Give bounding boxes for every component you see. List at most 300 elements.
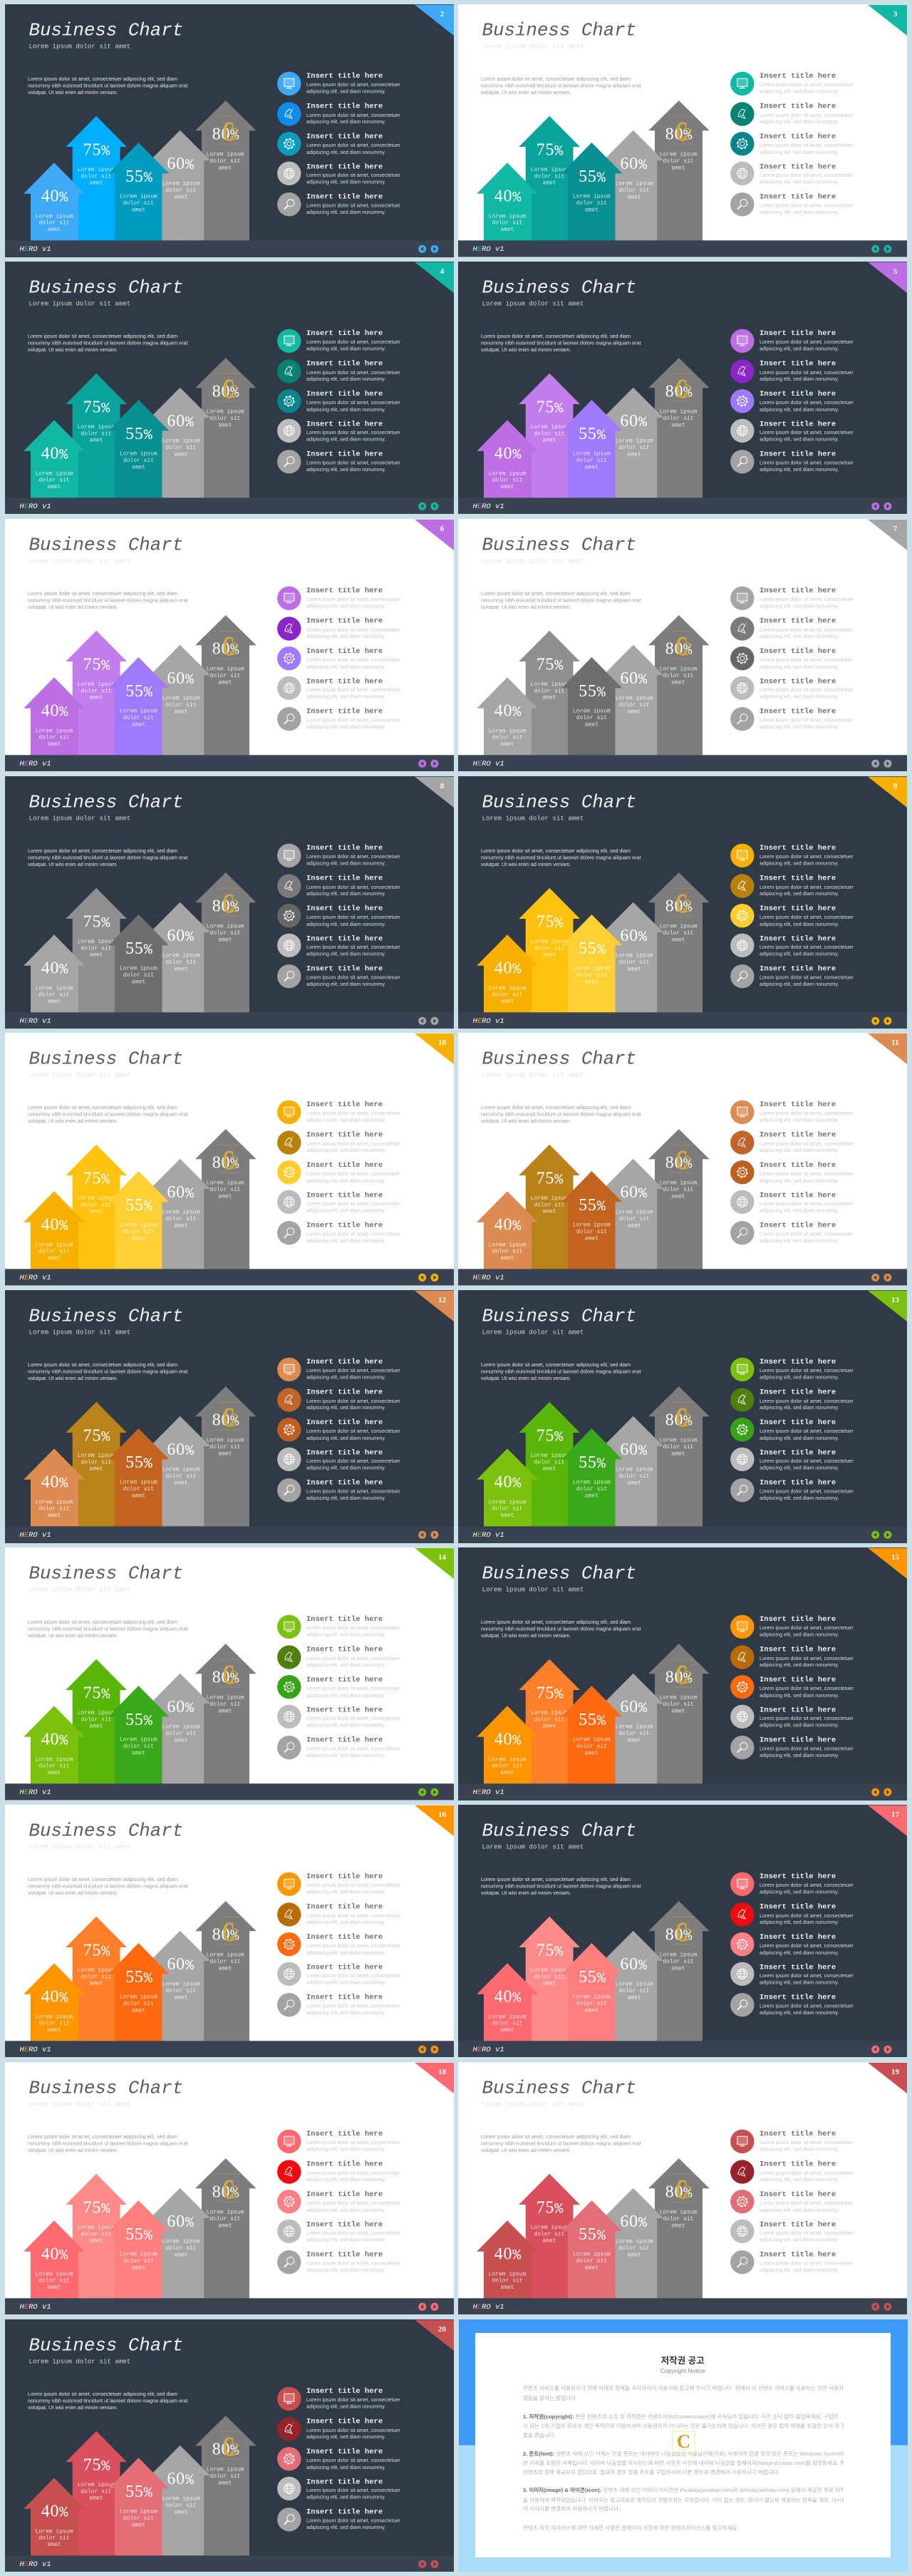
arrow: 40%: Lorem ipsum <box>35 2271 73 2277</box>
corner tab: 18 <box>437 2068 446 2076</box>
body text: Lorem ipsum dolor sit amet, consectetuer adipiscing elit, sed diam <box>481 76 631 82</box>
arrow: 40%: 40% <box>41 2502 68 2521</box>
corner tab <box>415 2062 453 2093</box>
logo watermark: C <box>676 373 688 403</box>
item 2: adipiscing elit, sed diam nonummy. <box>760 890 839 897</box>
item 4 <box>277 1190 400 1214</box>
arrow: 80% <box>648 2158 710 2298</box>
arrow: 60%: dolor sit <box>165 959 196 966</box>
arrow: 60%: dolor sit <box>165 2503 196 2509</box>
item 4 <box>277 2219 400 2243</box>
item 5: Insert title here <box>760 1222 836 1230</box>
item 1: Insert title here <box>306 2387 383 2396</box>
title: Business Chart <box>482 1049 636 1070</box>
arrow: 40% <box>24 934 85 1012</box>
arrow: 75%: amet <box>89 952 103 958</box>
item 2 <box>730 102 854 126</box>
arrow: 60%: 60% <box>621 1441 648 1460</box>
arrow: 55%: amet <box>585 979 598 985</box>
logo watermark <box>218 373 239 403</box>
panel: copyright notice <box>459 2319 908 2572</box>
item 4: Insert title here <box>760 1449 836 1458</box>
arrow: 40%: amet <box>501 1513 514 1519</box>
arrow: 40% <box>24 1963 85 2041</box>
arrow: 40% <box>477 2220 538 2298</box>
item 5 <box>277 964 400 988</box>
arrow: 60%: dolor sit <box>165 445 196 451</box>
arrow: 55%: Lorem ipsum <box>119 451 157 458</box>
item 4: adipiscing elit, sed diam nonummy. <box>760 1722 839 1729</box>
arrow: 80%: 80% <box>212 1668 239 1687</box>
logo watermark: C <box>222 888 234 918</box>
arrow: 80%: amet <box>672 1708 685 1714</box>
panel: slide 12 <box>4 1290 453 1543</box>
footer: HERO v1 <box>473 1788 504 1797</box>
corner tab: 16 <box>437 1810 446 1819</box>
item 3 <box>277 904 400 927</box>
item 5 <box>277 1221 400 1245</box>
logo watermark: C <box>676 1917 688 1947</box>
arrow: 55% <box>108 400 169 498</box>
arrow: 60%: amet <box>174 1223 187 1230</box>
arrow: 80%: dolor sit <box>663 673 694 679</box>
item 4: Insert title here <box>306 934 383 943</box>
item 2 <box>277 102 400 126</box>
subtitle: Lorem ipsum dolor sit amet <box>28 2100 130 2108</box>
arrow: 40%: Lorem ipsum <box>489 1500 527 1506</box>
item 2: Insert title here <box>306 1903 383 1912</box>
item 1: Insert title here <box>760 1101 836 1109</box>
arrow: 55%: dolor sit <box>576 972 607 979</box>
arrow: 75% <box>519 887 580 1012</box>
arrow: 80%: amet <box>218 1708 232 1714</box>
arrow: 40%: amet <box>47 484 61 490</box>
item 3: Insert title here <box>760 1161 836 1170</box>
body text: Lorem ipsum dolor sit amet, consectetuer adipiscing elit, sed diam <box>481 1876 631 1882</box>
item 3 <box>277 2190 400 2213</box>
panel: slide 19 <box>458 2062 907 2314</box>
arrow: 55%: 55% <box>125 425 152 444</box>
item 4 <box>730 2219 854 2243</box>
arrow: 60%: 60% <box>167 2212 194 2232</box>
arrow: 60% <box>150 388 209 498</box>
item 2: adipiscing elit, sed diam nonummy. <box>306 1404 385 1411</box>
item 3: Insert title here <box>306 2448 383 2456</box>
item 3: adipiscing elit, sed diam nonummy. <box>306 1949 385 1956</box>
arrow: 55%: dolor sit <box>576 1229 607 1235</box>
item 2: Insert title here <box>306 360 383 369</box>
arrow: 60%: dolor sit <box>619 702 650 709</box>
item 2 <box>730 1902 854 1927</box>
arrow: 40%: amet <box>47 741 61 748</box>
title: Business Chart <box>482 792 636 813</box>
arrow: 80% <box>195 2158 256 2298</box>
item 4 <box>277 1448 400 1471</box>
arrow: 80%: amet <box>218 1451 232 1458</box>
item 4: Insert title here <box>760 934 836 943</box>
item 5 <box>277 1993 400 2016</box>
item 3: Lorem ipsum dolor sit amet, consectetuer <box>306 1171 400 1178</box>
arrow: 60% <box>150 644 209 755</box>
item 2: Insert title here <box>760 874 836 882</box>
logo watermark: C <box>222 1145 234 1175</box>
item 3: Lorem ipsum dolor sit amet, consectetuer <box>760 1428 854 1434</box>
item 3: adipiscing elit, sed diam nonummy. <box>306 2463 385 2470</box>
body text: Lorem ipsum dolor sit amet, consectetuer adipiscing elit, sed diam <box>481 1361 631 1368</box>
item 3: Insert title here <box>760 905 836 913</box>
item 1: Insert title here <box>306 844 383 852</box>
arrow: 40%: 40% <box>41 2245 68 2264</box>
arrow: 75%: dolor sit <box>81 1460 111 1466</box>
arrow: 55%: 55% <box>579 939 606 959</box>
arrow: 80%: Lorem ipsum <box>660 409 698 416</box>
logo watermark <box>672 1917 693 1947</box>
item 1: Lorem ipsum dolor sit amet, consectetuer <box>760 81 854 88</box>
item 3: Insert title here <box>760 2190 836 2199</box>
arrow: 55%: Lorem ipsum <box>119 2251 157 2257</box>
panel: slide 3 <box>458 4 907 257</box>
arrow: 60%: 60% <box>167 1698 194 1717</box>
item 5: adipiscing elit, sed diam nonummy. <box>306 2009 385 2016</box>
arrow: 60%: 60% <box>167 1183 194 1202</box>
logo watermark <box>672 2431 695 2453</box>
arrow: 55%: amet <box>131 979 145 985</box>
arrow: 40%: Lorem ipsum <box>35 2528 73 2535</box>
arrow: 80%: 80% <box>665 1668 693 1687</box>
item 2: Insert title here <box>760 1389 836 1397</box>
arrow: 60%: 60% <box>167 2470 194 2489</box>
title: Business Chart <box>482 535 636 555</box>
arrow: 55% <box>561 915 622 1012</box>
arrow: 75%: 75% <box>83 655 110 674</box>
arrow: 60%: 60% <box>621 1955 648 1974</box>
item 1: Insert title here <box>760 329 836 338</box>
item 5: adipiscing elit, sed diam nonummy. <box>306 723 385 729</box>
item 4: adipiscing elit, sed diam nonummy. <box>306 950 385 957</box>
item 5: Insert title here <box>306 1994 383 2002</box>
arrow: 60% <box>603 2188 663 2298</box>
item 2: Lorem ipsum dolor sit amet, consectetuer <box>306 2426 400 2433</box>
arrow: 55%: amet <box>585 1236 598 1242</box>
item 3: adipiscing elit, sed diam nonummy. <box>760 2207 839 2213</box>
item 5: Insert title here <box>306 964 383 973</box>
arrow: 55%: 55% <box>579 1453 606 1473</box>
item 4: Insert title here <box>760 420 836 428</box>
arrow: 60%: dolor sit <box>619 445 650 451</box>
item 4: Lorem ipsum dolor sit amet, consectetuer <box>306 944 400 950</box>
arrow: 40%: amet <box>501 2027 514 2034</box>
arrow: 55%: Lorem ipsum <box>119 1480 157 1486</box>
arrow: 40%: 40% <box>494 2245 522 2264</box>
item 3 <box>277 1675 400 1699</box>
item 1: adipiscing elit, sed diam nonummy. <box>760 1888 839 1895</box>
body text: volutpat. Ut wisi enim ad minim veniam. <box>27 346 118 353</box>
item 2: Lorem ipsum dolor sit amet, consectetuer <box>760 883 854 890</box>
arrow: 75%: Lorem ipsum <box>531 167 569 173</box>
item 3: Lorem ipsum dolor sit amet, consectetuer <box>760 142 854 148</box>
arrow: 75%: Lorem ipsum <box>77 167 115 173</box>
arrow: 75%: Lorem ipsum <box>77 1195 115 1202</box>
arrow: 40%: dolor sit <box>38 1506 69 1513</box>
arrow: 80%: 80% <box>212 382 239 401</box>
arrow: 55% <box>108 657 169 755</box>
arrow: 60%: amet <box>174 2252 187 2258</box>
item 4: adipiscing elit, sed diam nonummy. <box>306 2493 385 2500</box>
body text: volutpat. Ut wisi enim ad minim veniam. <box>481 1632 571 1639</box>
body text: volutpat. Ut wisi enim ad minim veniam. <box>481 89 571 96</box>
arrow: 60%: dolor sit <box>619 187 650 194</box>
item 1: Insert title here <box>760 1615 836 1624</box>
logo watermark: C <box>222 116 234 146</box>
body text: nonummy nibh euismod tincidunt ut laoreet dolore magna aliquam erat <box>481 2140 641 2146</box>
arrow: 75%: 75% <box>537 1684 564 1703</box>
footer: HERO v1 <box>19 1017 51 1026</box>
item 2: adipiscing elit, sed diam nonummy. <box>760 2176 839 2183</box>
arrow: 80%: amet <box>672 165 685 171</box>
arrow: 80%: Lorem ipsum <box>206 923 244 929</box>
corner tab <box>868 1291 907 1322</box>
arrow: 75%: dolor sit <box>81 1974 111 1980</box>
arrow: 40%: amet <box>501 2284 514 2291</box>
item 2: Lorem ipsum dolor sit amet, consectetuer <box>306 883 400 890</box>
item 5: adipiscing elit, sed diam nonummy. <box>760 980 839 986</box>
arrow: 80% <box>195 358 256 498</box>
item 4: adipiscing elit, sed diam nonummy. <box>306 1722 385 1729</box>
arrow: 80%: 80% <box>665 639 693 659</box>
item 4: adipiscing elit, sed diam nonummy. <box>760 693 839 699</box>
arrow: 55%: 55% <box>579 1968 606 1987</box>
arrow: 55%: amet <box>131 464 145 470</box>
item 4 <box>730 933 854 957</box>
item 4: adipiscing elit, sed diam nonummy. <box>760 1207 839 1214</box>
arrow: 55%: amet <box>585 721 598 728</box>
item 4 <box>277 933 400 957</box>
item 4 <box>730 162 854 185</box>
arrow: 55%: dolor sit <box>123 1743 154 1750</box>
corner tab: 20 <box>437 2325 446 2334</box>
arrow: 75%: 75% <box>83 1684 110 1703</box>
item 4: Lorem ipsum dolor sit amet, consectetuer <box>760 1972 854 1979</box>
arrow: 75%: dolor sit <box>534 1716 565 1723</box>
item 2: Lorem ipsum dolor sit amet, consectetuer <box>760 1912 854 1919</box>
arrow: 60%: dolor sit <box>165 1473 196 1480</box>
panel: slide 17 <box>458 1805 907 2057</box>
arrow: 55%: dolor sit <box>576 1743 607 1750</box>
corner tab: 5 <box>893 267 898 276</box>
footer <box>4 498 453 514</box>
arrow: 55%: amet <box>585 2265 598 2271</box>
item 3: Lorem ipsum dolor sit amet, consectetuer <box>760 914 854 920</box>
item 2: Lorem ipsum dolor sit amet, consectetuer <box>760 1140 854 1147</box>
item 5 <box>730 964 854 988</box>
subtitle: Lorem ipsum dolor sit amet <box>482 1071 584 1079</box>
logo watermark <box>672 116 693 146</box>
arrow: 55%: 55% <box>125 682 152 701</box>
item 3: adipiscing elit, sed diam nonummy. <box>760 1178 839 1184</box>
item 4: Insert title here <box>306 163 383 171</box>
arrow: 40% <box>477 934 538 1012</box>
body text: volutpat. Ut wisi enim ad minim veniam. <box>27 860 118 867</box>
arrow: 60% <box>150 2445 209 2555</box>
panel: slide 6 <box>4 519 453 771</box>
arrow: 80%: 80% <box>665 125 693 144</box>
arrow: 40%: amet <box>501 484 514 490</box>
arrow: 60%: Lorem ipsum <box>616 695 653 701</box>
arrow: 55%: dolor sit <box>576 2001 607 2007</box>
footer <box>4 2555 453 2572</box>
corner tab <box>868 2062 907 2093</box>
body text <box>481 333 641 353</box>
arrow: 55%: Lorem ipsum <box>119 1737 157 1743</box>
footer: HERO v1 <box>473 2046 504 2054</box>
arrow: 80%: Lorem ipsum <box>206 1695 244 1701</box>
item 2: Lorem ipsum dolor sit amet, consectetuer <box>306 1398 400 1404</box>
item 3 <box>730 904 854 927</box>
item 4: Lorem ipsum dolor sit amet, consectetuer <box>760 1715 854 1721</box>
body text: volutpat. Ut wisi enim ad minim veniam. <box>481 603 571 609</box>
arrow: 55%: Lorem ipsum <box>119 708 157 714</box>
arrow: 40% <box>477 1706 538 1784</box>
arrow: 80%: Lorem ipsum <box>206 1180 244 1187</box>
arrow: 80%: dolor sit <box>209 930 240 937</box>
arrow: 55%: dolor sit <box>123 972 154 979</box>
arrow: 40%: dolor sit <box>38 478 69 484</box>
arrow: 40%: amet <box>47 999 61 1005</box>
arrow: 80% <box>648 1386 710 1527</box>
arrow: 60%: dolor sit <box>619 1731 650 1737</box>
arrow: 60%: dolor sit <box>165 702 196 709</box>
item 4: Insert title here <box>306 1192 383 1200</box>
item 2: Insert title here <box>760 1903 836 1912</box>
arrow: 55%: dolor sit <box>123 2001 154 2007</box>
arrow: 55% <box>561 400 622 498</box>
item 1: Lorem ipsum dolor sit amet, consectetuer <box>760 1882 854 1888</box>
footer <box>4 240 453 257</box>
arrow: 75%: amet <box>89 180 103 187</box>
item 3: Lorem ipsum dolor sit amet, consectetuer <box>306 1942 400 1949</box>
body text <box>27 2133 187 2153</box>
corner tab: 2 <box>440 10 444 19</box>
arrow: 60%: dolor sit <box>165 1216 196 1222</box>
footer <box>4 1012 453 1029</box>
arrow: 40%: 40% <box>41 1988 68 2007</box>
arrow: 60%: dolor sit <box>619 1216 650 1222</box>
item 2: adipiscing elit, sed diam nonummy. <box>760 118 839 125</box>
body text <box>27 333 187 353</box>
body text: nonummy nibh euismod tincidunt ut laoreet dolore magna aliquam erat <box>481 597 641 603</box>
title: Business Chart <box>28 792 183 813</box>
item 4: adipiscing elit, sed diam nonummy. <box>760 950 839 957</box>
item 2: Lorem ipsum dolor sit amet, consectetuer <box>760 2170 854 2176</box>
item 4: Lorem ipsum dolor sit amet, consectetuer <box>760 429 854 436</box>
item 1: adipiscing elit, sed diam nonummy. <box>306 1888 385 1895</box>
item 5 <box>277 192 400 216</box>
arrow: 60%: amet <box>628 1994 641 2001</box>
logo watermark <box>218 1402 239 1433</box>
arrow: 80% <box>648 1901 710 2041</box>
arrow: 40%: 40% <box>494 445 522 464</box>
arrow: 55%: amet <box>131 1750 145 1756</box>
title: Business Chart <box>28 20 183 41</box>
item 2: Insert title here <box>306 103 383 111</box>
arrow: 40%: amet <box>47 2542 61 2548</box>
body text: nonummy nibh euismod tincidunt ut laoreet dolore magna aliquam erat <box>481 1369 641 1375</box>
arrow: 60%: 60% <box>167 1955 194 1974</box>
arrow: 40%: amet <box>47 1255 61 1262</box>
arrow: 40%: 40% <box>41 445 68 464</box>
arrow: 80%: Lorem ipsum <box>206 2209 244 2215</box>
arrow: 55%: Lorem ipsum <box>573 965 611 972</box>
arrow: 80%: dolor sit <box>663 1187 694 1193</box>
arrow: 80%: amet <box>218 422 232 428</box>
arrow: 40% <box>24 2478 85 2555</box>
arrow: 60%: Lorem ipsum <box>616 2238 653 2245</box>
arrow: 55%: 55% <box>125 1968 152 1987</box>
item 1: Lorem ipsum dolor sit amet, consectetuer <box>306 2139 400 2145</box>
arrow: 40%: dolor sit <box>38 2535 69 2541</box>
item 2: Lorem ipsum dolor sit amet, consectetuer <box>306 626 400 632</box>
arrow: 80%: 80% <box>665 2183 693 2202</box>
body text <box>481 590 641 609</box>
arrow: 40%: 40% <box>41 187 68 207</box>
arrow: 40%: dolor sit <box>38 220 69 227</box>
body text: volutpat. Ut wisi enim ad minim veniam. <box>27 2404 118 2410</box>
item 4: adipiscing elit, sed diam nonummy. <box>306 1465 385 1471</box>
item 2: Insert title here <box>760 617 836 625</box>
panel: slide 11 <box>458 1033 907 1286</box>
item 1: Insert title here <box>306 2130 383 2138</box>
subtitle: Lorem ipsum dolor sit amet <box>28 814 130 822</box>
clause 1 line 3: 벌을 받습니다. <box>523 2432 556 2438</box>
item 5: Insert title here <box>306 1736 383 1745</box>
item 1: Lorem ipsum dolor sit amet, consectetuer <box>306 1367 400 1374</box>
arrow: 40%: 40% <box>41 1473 68 1493</box>
arrow: 60%: 60% <box>621 927 648 946</box>
arrow: 55%: dolor sit <box>123 2258 154 2265</box>
item 3: Lorem ipsum dolor sit amet, consectetuer <box>306 142 400 148</box>
arrow: 40%: amet <box>47 1770 61 1776</box>
body text <box>481 2133 641 2153</box>
arrow: 75%: dolor sit <box>534 688 565 694</box>
arrow: 80%: 80% <box>212 639 239 659</box>
body text: Lorem ipsum dolor sit amet, consectetuer adipiscing elit, sed diam <box>27 1361 177 1368</box>
arrow: 80%: Lorem ipsum <box>660 1952 698 1959</box>
corner tab: 17 <box>891 1810 900 1819</box>
subtitle: Lorem ipsum dolor sit amet <box>28 2357 130 2365</box>
item 1: Lorem ipsum dolor sit amet, consectetuer <box>306 1882 400 1888</box>
item 5: adipiscing elit, sed diam nonummy. <box>760 1752 839 1758</box>
item 2 <box>277 1131 400 1155</box>
item 3: adipiscing elit, sed diam nonummy. <box>306 1435 385 1441</box>
body text: volutpat. Ut wisi enim ad minim veniam. <box>27 1375 118 1381</box>
body text: nonummy nibh euismod tincidunt ut laoreet dolore magna aliquam erat <box>27 854 187 860</box>
item 3: adipiscing elit, sed diam nonummy. <box>306 149 385 155</box>
item 5: adipiscing elit, sed diam nonummy. <box>306 980 385 986</box>
arrow: 75%: Lorem ipsum <box>77 681 115 688</box>
item 5: Lorem ipsum dolor sit amet, consectetuer <box>760 202 854 208</box>
item 5: Insert title here <box>760 193 836 202</box>
arrow: 40%: amet <box>501 1255 514 1262</box>
arrow: 75%: Lorem ipsum <box>531 939 569 945</box>
arrow: 40% <box>24 2220 85 2298</box>
item 1 <box>730 1358 854 1381</box>
body text: volutpat. Ut wisi enim ad minim veniam. <box>481 1890 571 1896</box>
item 5: Lorem ipsum dolor sit amet, consectetuer <box>306 2260 400 2266</box>
footer <box>458 2298 907 2314</box>
corner tab <box>415 1805 453 1836</box>
item 1: Insert title here <box>760 2130 836 2138</box>
arrow: 60%: 60% <box>621 669 648 689</box>
